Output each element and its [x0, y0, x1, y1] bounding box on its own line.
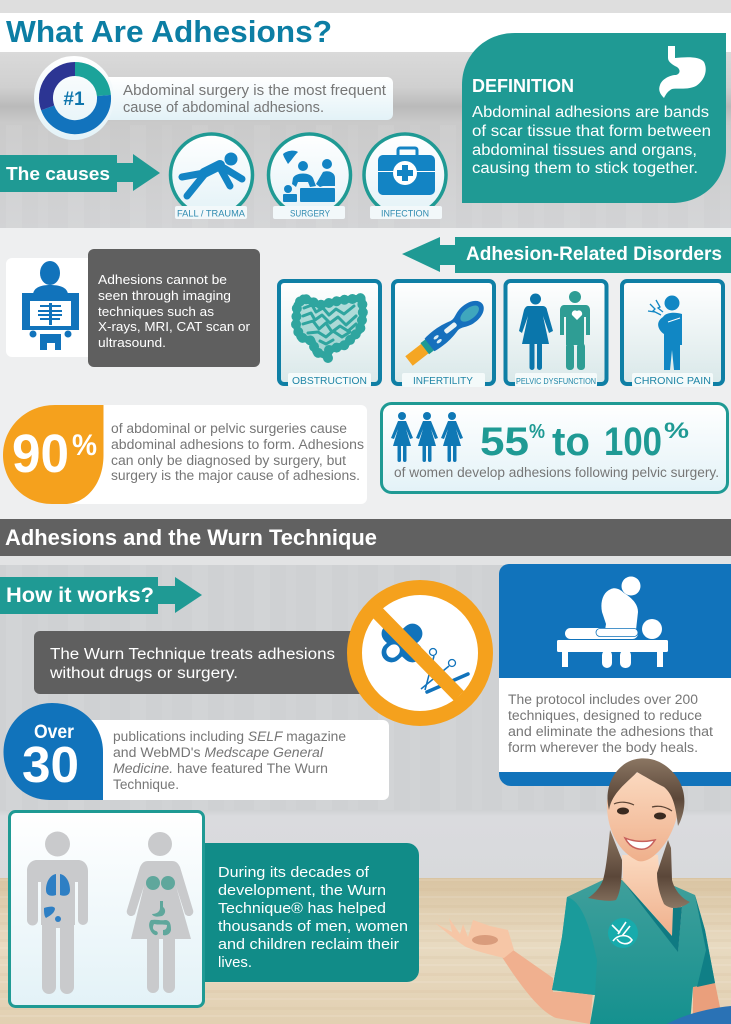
- cause: fall / trauma: FALL / TRAUMA: [177, 208, 245, 218]
- decades of development panel: development, the Wurn: [218, 882, 386, 899]
- 55% to 100% stat: of women develop adhesions following pelvic surgery.: [394, 465, 719, 480]
- label: [273, 206, 345, 219]
- arrow: how it works: [0, 577, 202, 614]
- disorder: chronic pain: [622, 281, 723, 387]
- face: [607, 772, 679, 861]
- over 30 stat: [4, 703, 389, 800]
- organs: breasts, stomach, intestines: [146, 876, 175, 935]
- blue badge: [4, 703, 103, 800]
- text box: Adhesions cannot be: [98, 273, 227, 287]
- 55% to 100% stat: to: [552, 420, 590, 464]
- disorder: infertility: INFERTILITY: [413, 375, 473, 387]
- cause: infection: [364, 134, 446, 219]
- 90% stat: [3, 405, 367, 504]
- smile: [625, 838, 655, 849]
- definition panel: [462, 33, 726, 203]
- definition panel: causing them to stick together.: [472, 160, 698, 177]
- icon: first-aid case: [378, 148, 435, 195]
- disorder: pelvic dysfunction: PELVIC DYSFUNCTION: [516, 377, 596, 386]
- hair cap: [608, 758, 684, 826]
- arrow: how it works: How it works?: [6, 584, 154, 607]
- over 30 stat: Medicine. have featured The Wurn: [113, 761, 328, 776]
- 90% stat: 90: [12, 424, 69, 484]
- collar: [622, 880, 682, 952]
- section heading bar: [0, 519, 731, 556]
- orange badge: [3, 405, 104, 504]
- callout pill: cause of abdominal adhesions.: [123, 100, 324, 116]
- scissors and scalpel: [421, 648, 468, 692]
- disorder: obstruction: OBSTRUCTION: [292, 375, 367, 387]
- no drugs or surgery callout: The Wurn Technique treats adhesions: [50, 646, 335, 663]
- icon: surgeons: [283, 151, 335, 202]
- icon: falling figure: [182, 152, 242, 196]
- tablet: [667, 1006, 731, 1024]
- over 30 stat: publications including SELF magazine: [113, 729, 346, 744]
- icon: stomach: [659, 46, 706, 98]
- definition panel: Abdominal adhesions are bands: [472, 104, 709, 121]
- 55% to 100% stat: 55: [480, 420, 529, 464]
- definition panel: DEFINITION: [472, 76, 574, 96]
- decades of development panel: lives.: [218, 954, 252, 971]
- icon: three women: [391, 412, 463, 462]
- icon: prohibition sign: [354, 588, 486, 718]
- woman figure: [127, 832, 193, 993]
- icon: pregnancy test: [403, 296, 489, 369]
- cause: fall / trauma: [170, 134, 252, 219]
- protocol panel: The protocol includes over 200: [508, 692, 698, 707]
- icon: person in pain: [648, 296, 682, 370]
- badge: [608, 918, 638, 948]
- cause: surgery: [268, 134, 350, 219]
- label: [175, 206, 247, 219]
- definition panel: of scar tissue that form between: [472, 123, 711, 140]
- no drugs or surgery callout: [34, 588, 486, 718]
- protocol panel: techniques, designed to reduce: [508, 708, 702, 723]
- man figure: [27, 832, 88, 994]
- label: [632, 373, 713, 387]
- disorder: chronic pain: CHRONIC PAIN: [634, 375, 711, 387]
- no drugs or surgery callout: without drugs or surgery.: [49, 665, 238, 682]
- sleeve shading: [552, 897, 597, 995]
- decades of development panel: and children reclaim their: [218, 936, 399, 953]
- donut badge: [34, 56, 114, 140]
- nurse illustration: [435, 758, 731, 1024]
- callout pill: Abdominal surgery is the most frequent: [123, 83, 386, 99]
- icon: woman: [519, 294, 553, 370]
- over 30 stat: Over: [34, 722, 75, 743]
- bandage: [377, 620, 427, 666]
- protocol panel: form wherever the body heals.: [508, 740, 698, 755]
- disorder: infertility: [393, 281, 494, 387]
- 55% to 100% stat: %: [529, 421, 545, 443]
- 90% stat: surgery is the major cause of adhesions.: [111, 468, 360, 483]
- scrubs: [552, 880, 715, 1024]
- title: What Are Adhesions?: [6, 14, 332, 49]
- 55% to 100% stat: 100: [604, 420, 662, 464]
- eyes: [617, 808, 666, 820]
- long hair: [588, 830, 690, 908]
- over 30 stat: Technique.: [113, 777, 179, 792]
- right arm: [693, 983, 721, 1024]
- disorder: obstruction: [279, 281, 380, 387]
- over 30 stat: 30: [22, 736, 79, 793]
- definition panel: abdominal tissues and organs,: [472, 142, 697, 159]
- 90% stat: abdominal adhesions to form. Adhesions: [111, 437, 364, 452]
- icon: man with broken heart: [560, 291, 590, 370]
- 55% to 100% stat: %: [664, 418, 689, 443]
- brows: [614, 802, 672, 811]
- 90% stat: of abdominal or pelvic surgeries cause: [111, 421, 347, 436]
- section heading bar: Adhesions and the Wurn Technique: [5, 525, 377, 550]
- protocol panel: and eliminate the adhesions that: [508, 724, 713, 739]
- text box: X-rays, MRI, CAT scan or: [98, 320, 250, 334]
- over 30 stat: and WebMD's Medscape General: [113, 745, 324, 760]
- label: [515, 373, 597, 387]
- 90% stat: %: [72, 429, 97, 462]
- text box: [88, 249, 260, 367]
- cause: infection: INFECTION: [381, 208, 429, 218]
- protocol panel: [499, 564, 731, 786]
- neck and chest: [622, 855, 673, 936]
- icon: intestines: [296, 298, 363, 358]
- text box: techniques such as: [98, 305, 214, 319]
- 55% to 100% stat: [382, 404, 728, 492]
- icon: massage therapy: [557, 576, 668, 668]
- left arm and hand: [435, 918, 593, 1024]
- decades of development panel: Technique® has helped: [218, 900, 386, 917]
- donut badge: #1: [63, 89, 85, 110]
- text box: ultrasound.: [98, 336, 166, 350]
- label: [402, 373, 485, 387]
- decades of development panel: [205, 843, 419, 982]
- #1 callout: [34, 56, 393, 140]
- text box: seen through imaging: [98, 289, 231, 303]
- x-ray card: [6, 249, 260, 367]
- label: [370, 206, 442, 219]
- decades of development panel: During its decades of: [218, 864, 370, 881]
- arrow: the causes: The causes: [6, 164, 110, 184]
- arrow: adhesion-related disorders: Adhesion-Related Disorders: [466, 244, 722, 265]
- cause: surgery: SURGERY: [290, 208, 330, 218]
- organs: lungs, liver: [44, 874, 70, 922]
- label: [288, 373, 371, 387]
- callout pill: [100, 77, 393, 120]
- arrow: the causes: [0, 154, 160, 192]
- arrow: adhesion-related disorders: [402, 237, 731, 273]
- body diagram panel: [10, 812, 204, 1006]
- 90% stat: can only be diagnosed by surgery, but: [111, 453, 346, 468]
- icon: x-ray person: [22, 261, 79, 350]
- disorder: pelvic dysfunction: [506, 281, 606, 387]
- decades of development panel: thousands of men, women: [218, 918, 408, 935]
